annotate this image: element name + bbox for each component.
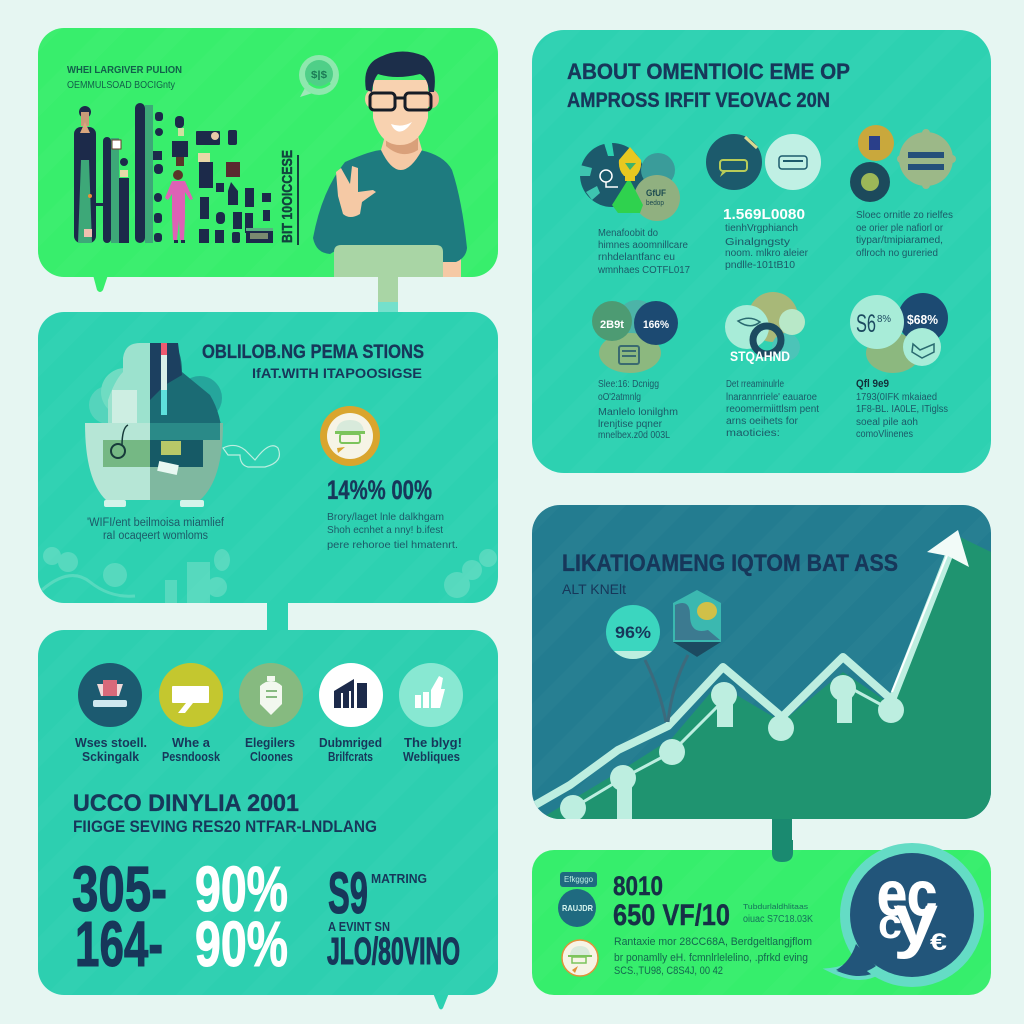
tag bbox=[560, 872, 597, 887]
icon: chat bubble bbox=[299, 55, 339, 97]
small note: Tubdurlaldhlitaas bbox=[743, 902, 808, 911]
tag: Efkgggo bbox=[564, 875, 594, 884]
icon row bbox=[78, 663, 463, 727]
cluster: stat circles bbox=[850, 293, 948, 373]
subheading: IfAT.WITH ITAPOOSIGSE bbox=[252, 365, 422, 381]
icon labels: Cloones bbox=[250, 749, 293, 764]
presenter subheading: OEMMULSOAD BOCIGnty bbox=[67, 80, 175, 91]
cluster a text: oO'2atmnlg bbox=[598, 392, 641, 403]
cluster c text: soeal pile aoh bbox=[856, 417, 918, 428]
cluster b text: maoticies: bbox=[726, 428, 780, 439]
callout strings bbox=[645, 655, 688, 722]
small note bbox=[743, 902, 813, 925]
callout: percent bubble bbox=[606, 605, 660, 659]
currency speech badge: y bbox=[893, 880, 938, 960]
big stats: JLO/80VINO bbox=[327, 931, 460, 973]
callout: percent bubble: 96% bbox=[615, 623, 651, 642]
cluster 1 text: rnhdelantfanc eu bbox=[598, 252, 675, 263]
heading bbox=[567, 59, 850, 112]
cluster: gears and bulb bbox=[580, 143, 680, 221]
figures bbox=[613, 871, 730, 932]
cluster: gears bbox=[850, 125, 956, 202]
cluster b text: Det rreaminulrle bbox=[726, 379, 784, 390]
currency speech badge: € bbox=[930, 929, 947, 956]
icon labels: Wses stoell. bbox=[75, 735, 147, 750]
small note: oiuac S7C18.03K bbox=[743, 914, 813, 925]
cluster 2 text bbox=[725, 223, 809, 271]
icon labels: Elegilers bbox=[245, 735, 295, 750]
presenter heading: WHEI LARGIVER PULION bbox=[67, 64, 182, 76]
section heading: UCCO DINYLIA 2001 bbox=[73, 790, 299, 817]
icon labels: Brilfcrats bbox=[328, 749, 373, 764]
stat description: pere rehoroe tiel hmatenrt. bbox=[327, 539, 458, 551]
cluster a text: Manlelo lonilghm bbox=[598, 407, 678, 418]
cluster b text: reoomermiittlsm pent bbox=[726, 404, 819, 415]
pink figure bbox=[165, 170, 193, 243]
big stats: S9 bbox=[328, 861, 368, 926]
icon: chat bubble: $|$ bbox=[311, 70, 328, 81]
big stats: 305- bbox=[72, 853, 167, 925]
cluster 2 text: tienhVrgphianch bbox=[725, 223, 798, 234]
icon labels: Sckingalk bbox=[82, 749, 140, 764]
cluster: globe circles bbox=[725, 292, 805, 364]
chart area and line bbox=[530, 537, 991, 823]
badge circle bbox=[558, 889, 596, 927]
description: SCS.,TU98, C8S4J, 00 42 bbox=[614, 965, 723, 977]
presenter figure bbox=[313, 51, 467, 277]
cluster: gears and bulb: GfUF bbox=[646, 188, 666, 198]
connector end bbox=[772, 840, 793, 862]
heading: ABOUT OMENTIOIC EME OP bbox=[567, 59, 850, 84]
cluster c text: 1793(0IFK mkaiaed bbox=[856, 392, 937, 403]
cluster 1 text: wmnhaes COTFL017 bbox=[597, 265, 690, 276]
cluster 1 text bbox=[597, 228, 690, 276]
cluster: stat circles: S6 bbox=[856, 310, 876, 338]
cluster: gears and bulb: bedop bbox=[646, 200, 664, 207]
cluster b text bbox=[726, 379, 819, 439]
heading: AMPROSS IRFIT VEOVAC 20N bbox=[567, 89, 830, 112]
cluster: chat circles bbox=[706, 134, 821, 190]
cluster a text: mnelbex.z0d 003L bbox=[598, 430, 670, 441]
icon grid bbox=[153, 112, 273, 243]
stat description bbox=[327, 511, 458, 551]
panel: vessel bbox=[38, 312, 498, 631]
cluster 3 text: oe orier ple nafiorl or bbox=[856, 223, 944, 234]
icon labels: Pesndoosk bbox=[162, 749, 221, 764]
icon labels: The blyg! bbox=[404, 735, 462, 750]
panel: currency summary bbox=[532, 840, 991, 995]
subheading: ALT KNElt bbox=[562, 581, 626, 597]
figures: 8010 bbox=[613, 871, 663, 901]
cluster 2 text: Ginalgngsty bbox=[725, 237, 790, 248]
icon: hat badge bbox=[562, 940, 598, 976]
cluster 3 text: Sloec ornitle zo rielfes bbox=[856, 210, 953, 221]
cluster b text: arns oeihets for bbox=[726, 416, 799, 427]
cluster a text bbox=[598, 379, 678, 441]
cluster 2 text: pndlle-101tB10 bbox=[725, 260, 795, 271]
cluster: stat circles: $68% bbox=[907, 312, 938, 327]
big stats bbox=[72, 853, 460, 980]
icon labels: Webliques bbox=[403, 749, 460, 764]
big stats: 90% bbox=[195, 853, 288, 925]
heading: OBLILOB.NG PEMA STIONS bbox=[202, 342, 424, 363]
cluster c text: Qfl 9e9 bbox=[856, 378, 889, 390]
icon labels bbox=[75, 735, 462, 764]
stat description: Brory/laget lnle dalkhgam bbox=[327, 511, 444, 523]
cluster 1 text: Menafoobit do bbox=[598, 228, 658, 239]
description: br ponamlly eH. fcmnlrlelelino, .pfrkd eving bbox=[614, 952, 808, 964]
cluster 3 text: oflroch no gureried bbox=[856, 248, 938, 259]
big stats: 90% bbox=[195, 908, 288, 980]
icon labels: Whe a bbox=[172, 735, 211, 750]
cluster 3 text: tiypar/tmipiaramed, bbox=[856, 235, 943, 246]
cluster b text: lnarannrriele' eauaroe bbox=[726, 392, 817, 403]
cluster: percent circles: 2B9t bbox=[600, 319, 624, 331]
cluster 3 text bbox=[856, 210, 953, 259]
callout: hexagon icon bbox=[673, 590, 721, 657]
stat figure: 14%% 00% bbox=[327, 475, 432, 505]
panel: icons and stats bbox=[38, 630, 498, 1010]
cluster: percent circles bbox=[592, 300, 678, 373]
cluster a text: lrenjtise pqner bbox=[598, 419, 663, 430]
big stats: MATRING bbox=[371, 872, 427, 886]
badge circle: RAUJDR bbox=[562, 903, 593, 913]
cluster c text: comoVlinenes bbox=[856, 429, 913, 440]
cluster: percent circles: 166% bbox=[643, 319, 669, 331]
cluster 1 text: himnes aoomnillcare bbox=[598, 240, 688, 251]
bar chart with figures bbox=[74, 103, 153, 243]
figures: 650 VF/10 bbox=[613, 899, 730, 932]
cluster 2 text: noom. mlkro aleier bbox=[725, 248, 809, 259]
cluster 2 figure: 1.569L0080 bbox=[723, 206, 805, 223]
panel: growth chart bbox=[530, 505, 991, 855]
section subheading: FIIGGE SEVING RES20 NTFAR-LNDLANG bbox=[73, 817, 377, 836]
cluster c text: 1F8-BL. IA0LE, ITiglss bbox=[856, 404, 948, 415]
vessel illustration bbox=[85, 343, 279, 507]
laptop and stand bbox=[334, 245, 443, 312]
cluster c text bbox=[856, 378, 948, 440]
decorative skyline and foliage bbox=[42, 547, 497, 603]
currency speech badge: ec bbox=[877, 860, 937, 929]
rotated bar label: BIT 10OICCESE bbox=[279, 150, 296, 243]
currency speech badge: c bbox=[878, 900, 902, 947]
vessel caption: 'WIFI/ent beilmoisa miamlief bbox=[87, 517, 225, 529]
icon labels: Dubmriged bbox=[319, 735, 382, 750]
icon: gold badge bbox=[320, 406, 380, 466]
cluster: globe circles: STQAHND bbox=[730, 348, 790, 364]
connector bbox=[267, 603, 288, 631]
description: Rantaxie mor 28CC68A, Berdgeltlangjflom bbox=[614, 936, 812, 948]
arrowhead bbox=[927, 530, 969, 567]
cluster: stat circles: 8% bbox=[877, 314, 891, 325]
heading: LIKATIOAMENG IQTOM BAT ASS bbox=[562, 550, 898, 577]
panel: vessel: raI ocaqeert womloms bbox=[103, 530, 208, 542]
cluster a text: Slee:16: Dcnigg bbox=[598, 379, 659, 390]
currency speech badge bbox=[830, 843, 984, 987]
stat description: Shoh ecnhet a nny! b.ifest bbox=[327, 524, 443, 536]
panel: overview bbox=[532, 30, 991, 473]
big stats: 164- bbox=[75, 908, 163, 980]
big stats: A EVINT SN bbox=[328, 920, 390, 934]
description bbox=[614, 936, 812, 977]
panel: presenter bbox=[38, 28, 498, 312]
